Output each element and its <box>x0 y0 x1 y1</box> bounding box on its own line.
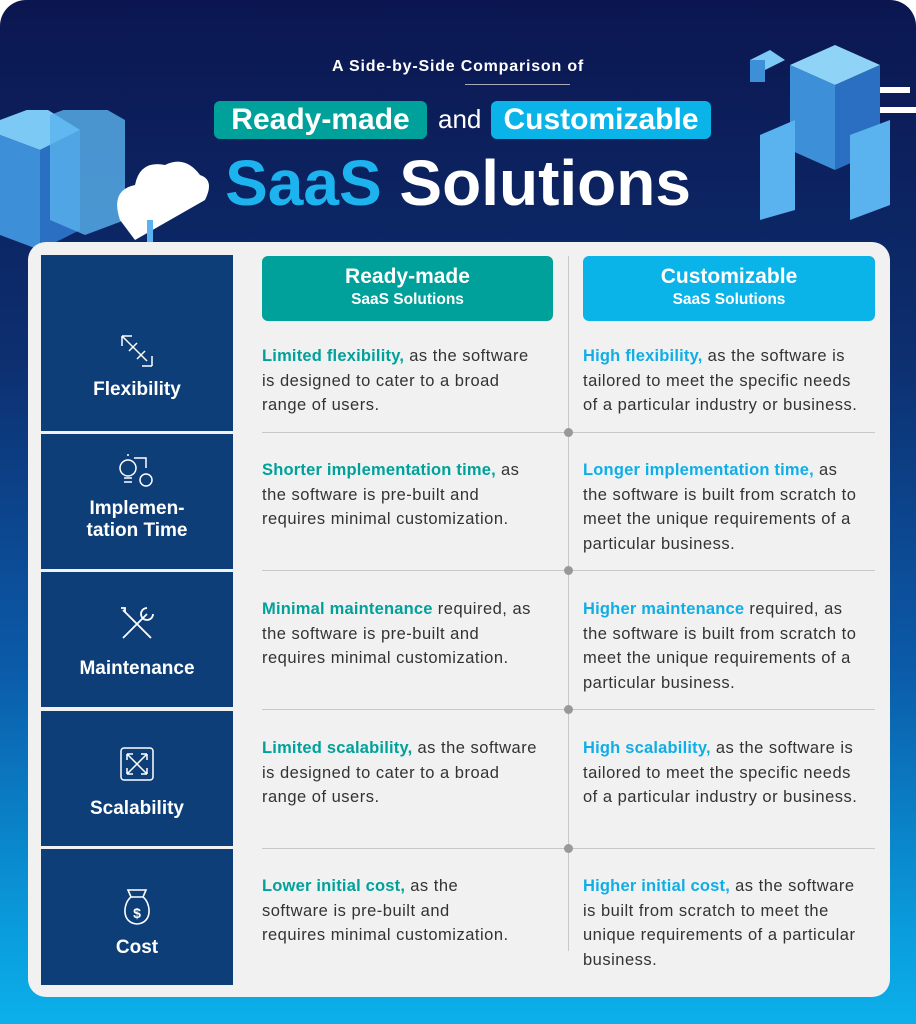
row text: implementation <box>262 461 519 528</box>
label: Cost: Cost <box>116 937 158 958</box>
row text: cost: Lower initial cost, as the <box>262 877 458 895</box>
text: particular business. <box>583 674 735 692</box>
text: Higher initial cost, as the software <box>583 877 855 895</box>
row text: flexibility: Limited flexibility, as the software <box>262 347 529 365</box>
title line: Ready-made and Customizable: Ready-made <box>231 103 410 136</box>
row text: maintenance: requires minimal customization. <box>262 649 509 667</box>
label: Implementation Time: tation Time <box>86 520 188 541</box>
column header: Ready-made <box>262 256 553 321</box>
text: meet the unique requirements of a <box>583 649 851 667</box>
title line: Ready-made and Customizable <box>214 101 711 139</box>
title line: Ready-made and Customizable: and <box>438 104 481 134</box>
label: Flexibility <box>41 255 233 431</box>
row text: maintenance <box>262 600 531 667</box>
row text: cost <box>262 877 509 944</box>
column header: Customizable: SaaS Solutions <box>673 291 785 308</box>
row text: flexibility: is designed to cater to a broad <box>262 372 499 390</box>
label: Maintenance: Maintenance <box>79 658 195 679</box>
text: of a particular industry or business. <box>583 396 857 414</box>
row text: scalability: is designed to cater to a broad <box>262 764 499 782</box>
illustration: right servers <box>750 45 916 220</box>
text: is built from scratch to meet the <box>583 902 829 920</box>
row text: cost: software is pre-built and <box>262 902 450 920</box>
text: meet the unique requirements of a <box>583 510 851 528</box>
text: Higher maintenance required, as <box>583 600 843 618</box>
label: Flexibility: Flexibility <box>93 379 181 400</box>
label: Cost: $ <box>133 905 141 921</box>
row text: maintenance: the software is pre-built and <box>262 624 479 642</box>
row text: implementation: requires minimal customization. <box>262 510 509 528</box>
text: High flexibility, as the software is <box>583 347 845 365</box>
label: Scalability <box>41 711 233 846</box>
table panel <box>28 242 890 997</box>
text: business. <box>583 950 657 968</box>
text: tailored to meet the specific needs <box>583 764 851 782</box>
label: Implementation Time <box>41 434 233 569</box>
row text: cost: requires minimal customization. <box>262 926 509 944</box>
row text: implementation: the software is pre-built and <box>262 486 479 504</box>
label: Maintenance <box>41 572 233 707</box>
row text: scalability <box>262 739 537 806</box>
title: SaaS Solutions: SaaS Solutions <box>225 147 691 219</box>
text: particular business. <box>583 534 735 552</box>
text: High scalability, as the software is <box>583 739 853 757</box>
label: Implementation Time: Implemen- <box>89 498 185 519</box>
row text: implementation: Shorter implementation time, as <box>262 461 519 479</box>
text: the software is built from scratch to <box>583 624 856 642</box>
row text: maintenance: Minimal maintenance required, as <box>262 600 531 618</box>
illustration: left servers and cloud <box>0 110 209 248</box>
label: Scalability: Scalability <box>90 798 184 819</box>
row text: scalability: Limited scalability, as the software <box>262 739 537 757</box>
text: Longer implementation time, as <box>583 461 837 479</box>
column header: Ready-made: Ready-made <box>345 265 470 288</box>
row text: flexibility: range of users. <box>262 396 380 414</box>
text: the software is built from scratch to <box>583 486 856 504</box>
column header: Ready-made: SaaS Solutions <box>351 291 464 308</box>
label: Cost <box>41 849 233 985</box>
title line: Ready-made and Customizable: Customizable <box>503 103 699 136</box>
row text: flexibility <box>262 347 529 414</box>
text: of a particular industry or business. <box>583 788 857 806</box>
subtitle: A Side-by-Side Comparison of <box>332 58 584 75</box>
text: unique requirements of a particular <box>583 926 855 944</box>
row text: scalability: range of users. <box>262 788 380 806</box>
column header: Customizable <box>583 256 875 321</box>
text: tailored to meet the specific needs <box>583 372 851 390</box>
column header: Customizable: Customizable <box>661 265 797 288</box>
